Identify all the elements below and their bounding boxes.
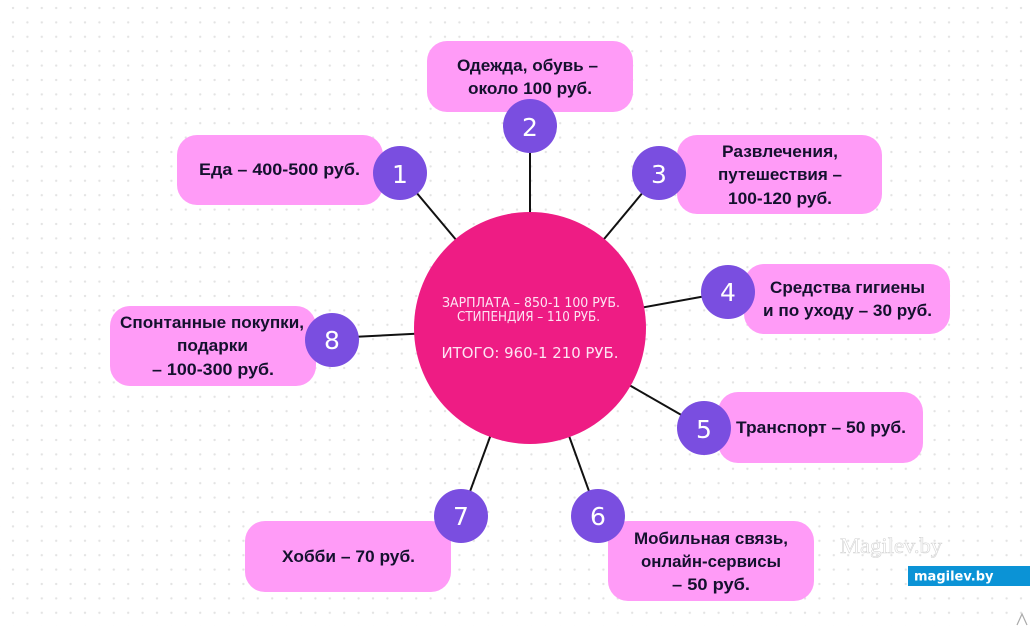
item 7: hobby — [245, 489, 488, 592]
item 1: food: 1 — [392, 160, 408, 189]
item 2: clothes: 2 — [522, 113, 538, 142]
item 6: mobile: онлайн-сервисы — [641, 552, 781, 571]
watermark: Magilev.by — [840, 533, 943, 558]
item 6: mobile: – 50 руб. — [672, 575, 750, 594]
item 6: mobile — [571, 489, 814, 601]
icon: up caret — [1017, 614, 1027, 625]
item 3: entertainment: Развлечения, — [722, 142, 838, 161]
item 6: mobile: 6 — [590, 502, 606, 531]
item 2: clothes — [427, 41, 633, 153]
item 8: spontaneous — [110, 306, 359, 386]
item 6: mobile: Мобильная связь, — [634, 529, 788, 548]
central circle: income: СТИПЕНДИЯ – 110 РУБ. — [457, 310, 600, 325]
item 7: hobby: 7 — [453, 502, 469, 531]
item 4: hygiene: и по уходу – 30 руб. — [763, 301, 932, 320]
item 3: entertainment: 100-120 руб. — [728, 189, 832, 208]
site badge — [908, 566, 1030, 586]
item 1: food: Еда – 400-500 руб. — [199, 160, 360, 179]
item 3: entertainment: путешествия – — [718, 165, 842, 184]
item 8: spontaneous: Спонтанные покупки, — [120, 313, 304, 332]
item 3: entertainment — [632, 135, 882, 214]
item 8: spontaneous: 8 — [324, 326, 340, 355]
central circle: income: ЗАРПЛАТА – 850-1 100 РУБ. — [442, 296, 620, 311]
item 7: hobby: Хобби – 70 руб. — [282, 547, 415, 566]
item 5: transport — [677, 392, 923, 463]
item 5: transport: Транспорт – 50 руб. — [736, 418, 906, 437]
item 4: hygiene: 4 — [720, 278, 736, 307]
item 4: hygiene — [701, 264, 950, 334]
item 3: entertainment: 3 — [651, 160, 667, 189]
item 2: clothes: Одежда, обувь – — [457, 56, 598, 75]
item 4: hygiene: Средства гигиены — [770, 278, 925, 297]
item 5: transport: 5 — [696, 415, 712, 444]
item 2: clothes: около 100 руб. — [468, 79, 592, 98]
central circle: income — [414, 212, 646, 444]
site badge: magilev.by — [914, 570, 994, 584]
item 1: food — [177, 135, 427, 205]
item 8: spontaneous: подарки — [177, 336, 248, 355]
central circle: income: ИТОГО: 960-1 210 РУБ. — [442, 344, 618, 362]
item 8: spontaneous: – 100-300 руб. — [152, 360, 274, 379]
